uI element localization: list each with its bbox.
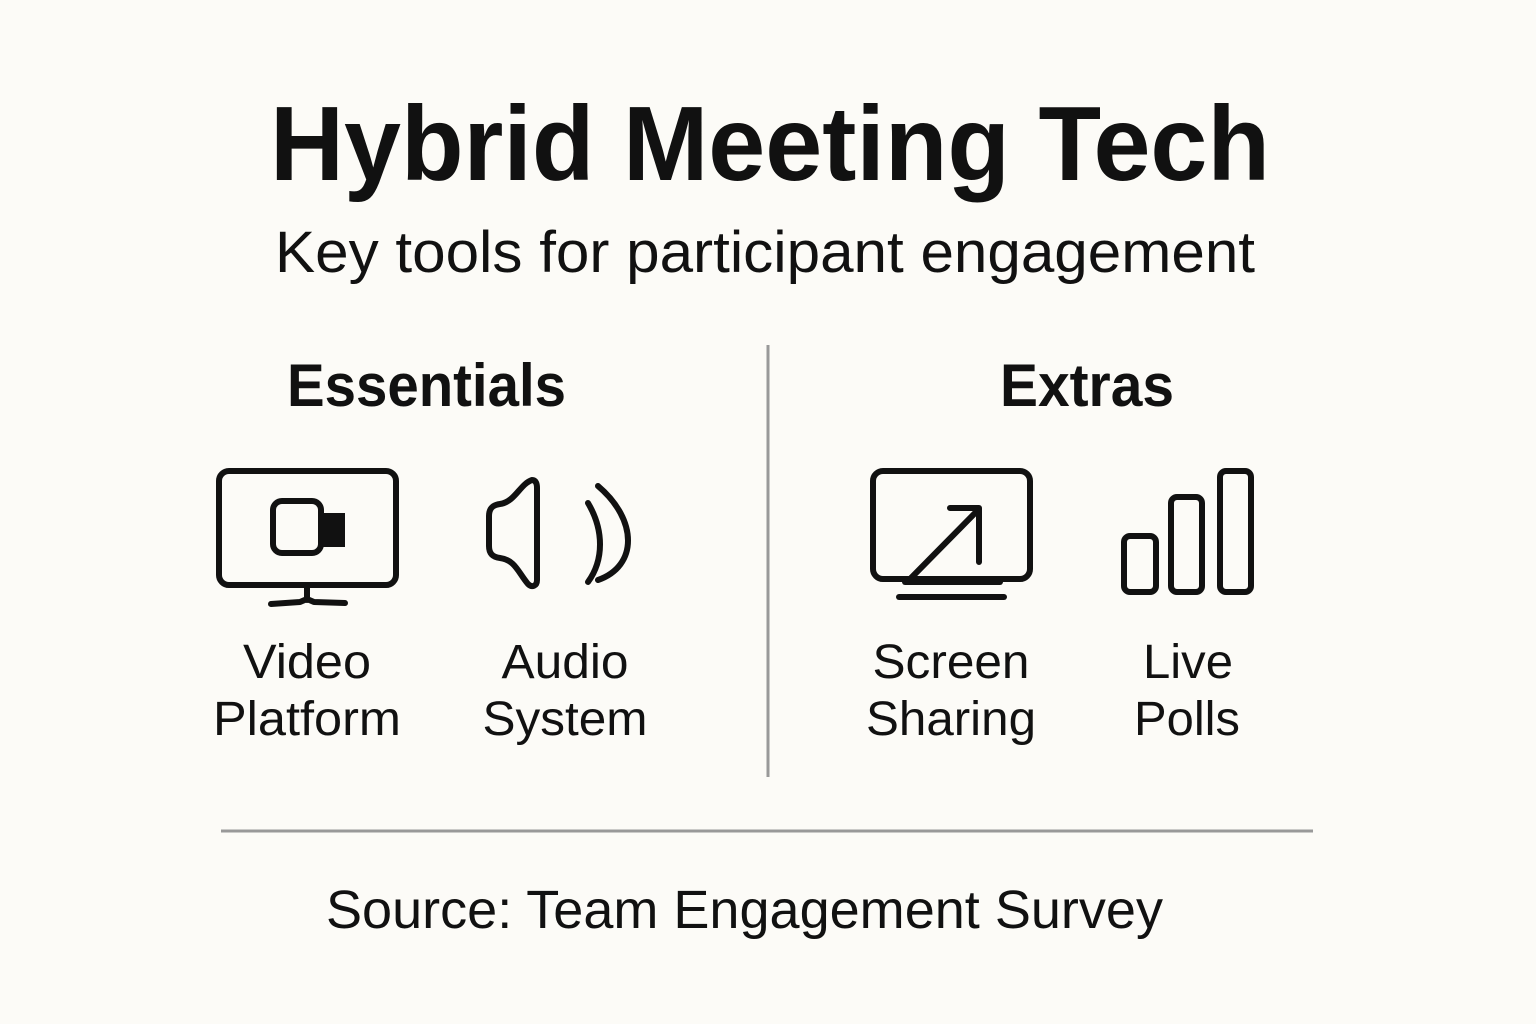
icon: audio speaker — [489, 480, 628, 586]
source note: Source: Team Engagement Survey — [326, 880, 1163, 940]
horizontal divider — [221, 830, 1313, 832]
label: audio system: System — [482, 693, 648, 746]
panel: essentials — [213, 352, 648, 746]
heading: essentials: Essentials — [287, 352, 566, 419]
label: audio system: Audio — [502, 636, 628, 689]
label: video platform: Platform — [213, 693, 401, 746]
icon: video platform monitor — [219, 471, 396, 604]
label: audio system — [482, 636, 648, 746]
label: live polls: Live — [1143, 636, 1233, 689]
label: video platform — [213, 636, 401, 746]
label: screen sharing — [866, 636, 1036, 746]
label: video platform: Video — [243, 636, 371, 689]
heading: extras: Extras — [1000, 352, 1174, 419]
label: live polls — [1134, 636, 1240, 746]
label: live polls: Polls — [1134, 693, 1240, 746]
icon: screen sharing — [873, 471, 1030, 597]
vertical divider — [766, 345, 770, 777]
label: screen sharing: Screen — [872, 636, 1030, 689]
icon: live polls bar chart — [1124, 471, 1251, 592]
label: screen sharing: Sharing — [866, 693, 1036, 746]
title: Hybrid Meeting Tech — [270, 85, 1270, 203]
subtitle: Key tools for participant engagement — [275, 220, 1255, 285]
panel: extras — [866, 352, 1251, 746]
